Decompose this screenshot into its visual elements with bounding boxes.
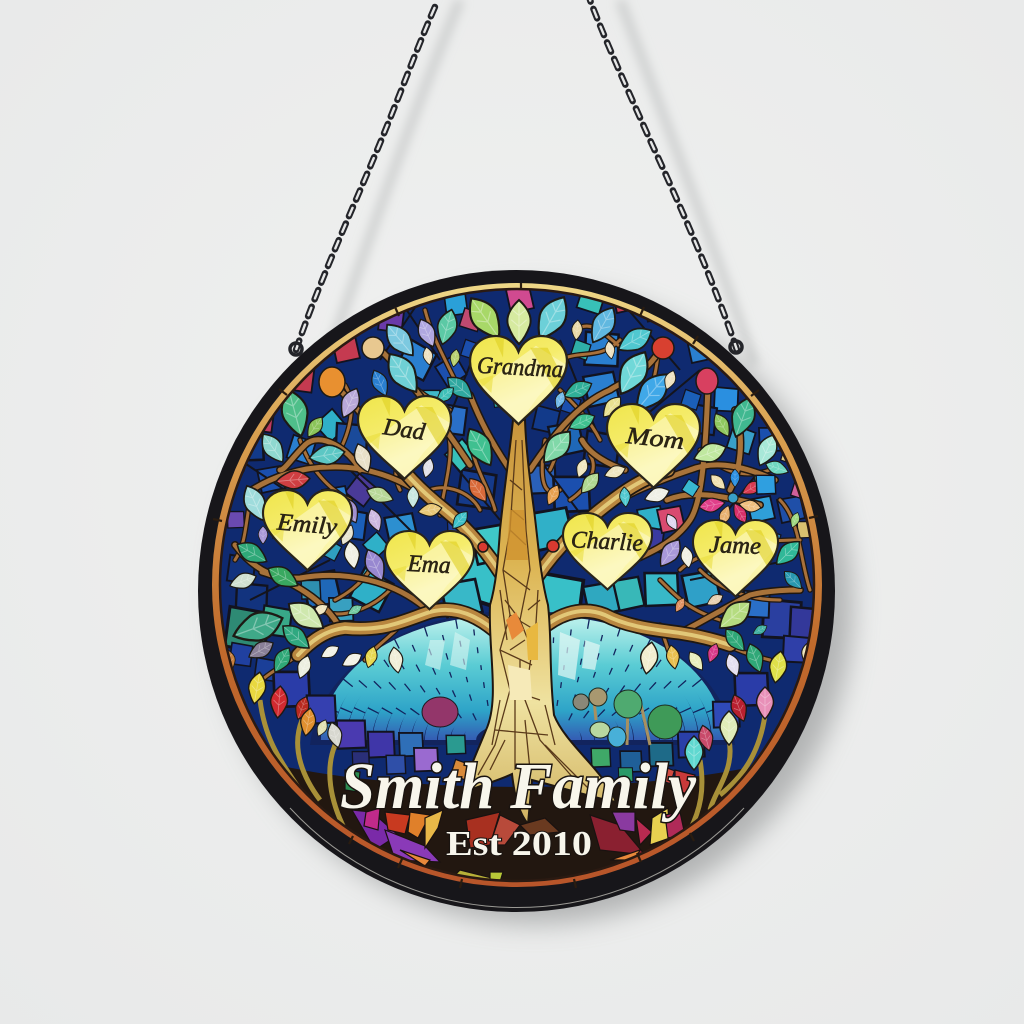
right teal dome (545, 612, 735, 745)
title: Smith Family: Smith Family (340, 750, 697, 823)
glass base colour (221, 290, 813, 787)
side blue and purple fields (267, 666, 774, 786)
chain shadows (325, 0, 755, 365)
distant trees right (573, 688, 682, 747)
left chain (290, 0, 438, 355)
left teal dome (310, 612, 500, 745)
black frame (198, 270, 835, 912)
lead lines (240, 300, 790, 600)
right chain (590, 0, 742, 353)
heart: Charlie (563, 513, 652, 590)
heart: Dad (358, 396, 451, 479)
heart: Ema (385, 531, 474, 609)
flower rosette (680, 469, 779, 526)
fruits (319, 337, 718, 552)
tree trunk and roots (464, 420, 616, 824)
heart: Grandma (470, 336, 567, 424)
panel: stained glass window (210, 280, 830, 890)
heart: Emily (263, 490, 352, 570)
thin dark line around glass (220, 289, 814, 881)
distant bush left (422, 697, 458, 727)
branches (235, 310, 810, 680)
disc drop shadow (217, 288, 853, 924)
bottom flowers and stems (246, 671, 773, 830)
bottom soil (288, 767, 750, 880)
heart: Mom (607, 404, 700, 488)
gold border ring (212, 283, 822, 887)
heart: Charlie: Charlie (570, 527, 644, 557)
subtitle: Est 2010: Est 2010 (446, 824, 592, 863)
ring segment joints (213, 283, 818, 888)
heart: Emily: Emily (275, 509, 338, 541)
heart: Jame (693, 520, 778, 596)
heart: Jame: Jame (709, 532, 762, 560)
heart: Grandma: Grandma (476, 353, 564, 383)
upper tree leaves (227, 291, 806, 638)
heart: Dad: Dad (380, 414, 428, 446)
frame highlight line (290, 808, 744, 908)
heart: Ema: Ema (406, 551, 451, 579)
bottom soil flowers (345, 770, 695, 884)
heart: Mom: Mom (624, 423, 685, 455)
mosaic tiles (217, 281, 830, 686)
lower tree leaves (223, 594, 816, 684)
